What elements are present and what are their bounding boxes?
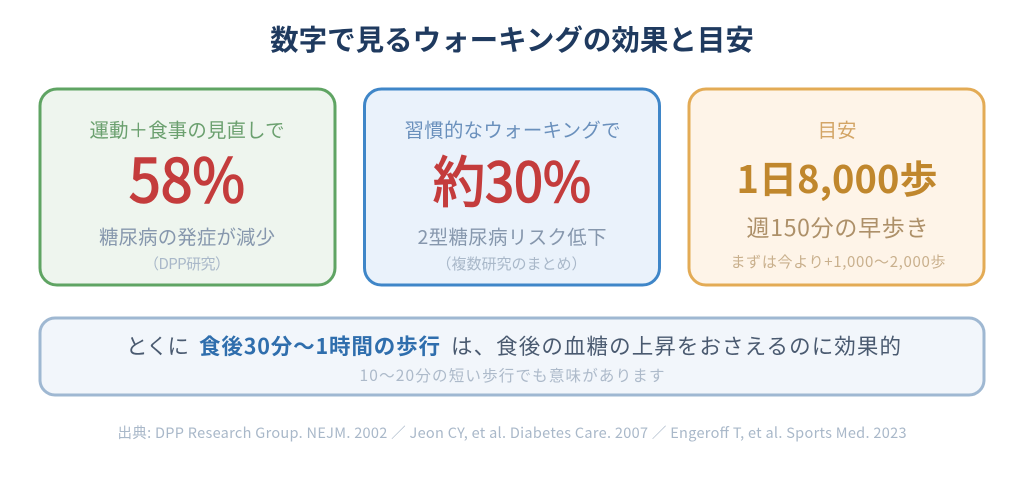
panel 3 note: まずは今より+1,000〜2,000歩 [730, 251, 946, 272]
panel 1 big number: 58% [129, 133, 245, 220]
panel 2 big number: 約30% [433, 138, 591, 218]
panel: diet and exercise [40, 89, 335, 285]
panel: daily target [689, 89, 984, 285]
callout highlighted phrase: 食後30分〜1時間の歩行 [199, 330, 440, 361]
callout main message: とくに [126, 330, 189, 361]
callout sub message: 10〜20分の短い歩行でも意味があります [360, 364, 664, 386]
panel 1 lead text: 運動＋食事の見直しで [90, 114, 284, 143]
panel 2 source note: （複数研究のまとめ） [436, 253, 586, 274]
title: 数字で見るウォーキングの効果と目安 [270, 18, 754, 59]
panel 2 lead text: 習慣的なウォーキングで [404, 114, 620, 143]
callout main message: は、食後の血糖の上昇をおさえるのに効果的 [451, 330, 901, 361]
panel 2 description: 2型糖尿病リスク低下 [418, 221, 606, 250]
panel 1 description: 糖尿病の発症が減少 [99, 221, 275, 250]
panel 1 source note: （DPP研究） [144, 253, 230, 274]
panel: habitual walking [364, 89, 660, 285]
callout: after-meal walking [40, 318, 984, 395]
callout main message [126, 330, 901, 361]
panel 3 big number: 1日8,000歩 [736, 149, 938, 204]
source citation: 出典: DPP Research Group. NEJM. 2002 ／ Jeon CY, et al. Diabetes Care. 2007 ／ Engeroff T, et al. Sports Med. 2023 [118, 422, 906, 443]
panel 3 lead text: 目安 [818, 114, 856, 143]
panel 3 description: 週150分の早歩き [746, 209, 928, 243]
